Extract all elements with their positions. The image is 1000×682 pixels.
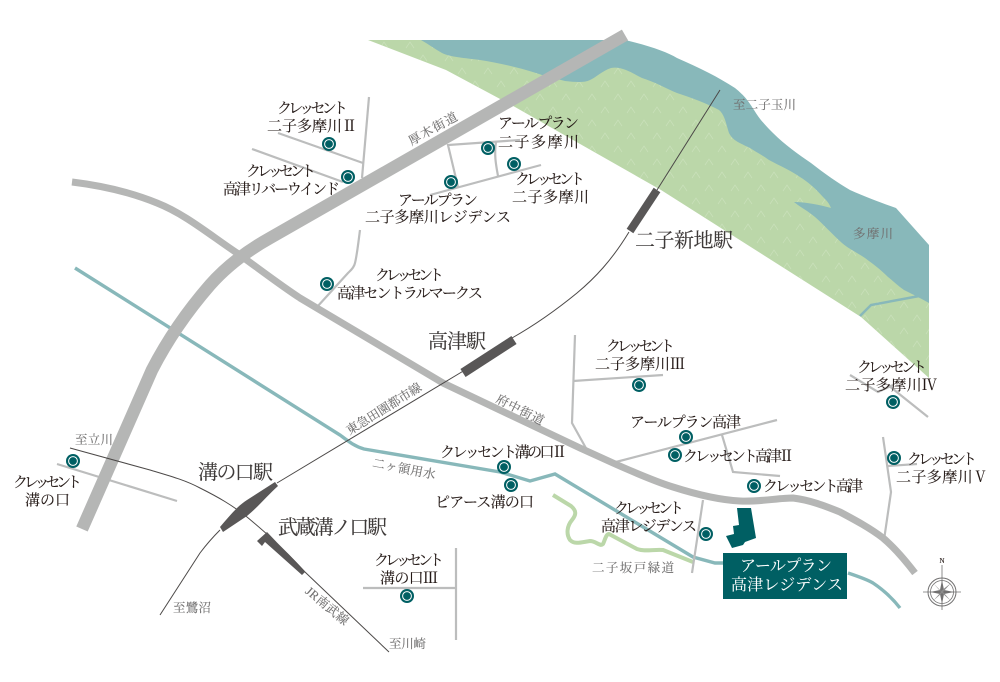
property building	[726, 508, 756, 548]
place and road labels: JR南武線	[303, 583, 352, 628]
greenway	[553, 495, 693, 562]
canal: Nikaryo irrigation	[75, 268, 900, 608]
station names: 高津駅	[428, 330, 486, 353]
place and road labels: 東急田園都市線	[343, 379, 425, 438]
property labels: クレッセント	[606, 339, 675, 355]
place and road labels: 至川崎	[389, 636, 426, 651]
property labels: 二子多摩川Ⅲ	[595, 355, 685, 373]
station names: 二子新地駅	[635, 229, 733, 252]
station: Mizonokuchi	[220, 482, 278, 532]
road: Atsugi Kaido	[82, 35, 625, 529]
property labels	[13, 101, 988, 587]
property labels: 高津リバーウインド	[223, 180, 340, 198]
property labels: 二子多摩川	[512, 188, 589, 206]
property labels: アールプラン	[498, 115, 579, 132]
place and road labels	[75, 98, 893, 651]
property labels: アールプラン	[398, 192, 478, 209]
property labels: 高津セントラルマークス	[337, 284, 483, 302]
property labels: アールプラン高津	[630, 413, 741, 431]
station: Futako-Shinchi	[630, 190, 657, 231]
property labels: 二子多摩川レジデンス	[365, 208, 511, 226]
property labels: クレッセント	[13, 475, 82, 491]
station names: 溝の口駅	[198, 461, 273, 484]
place and road labels: 二ヶ領用水	[371, 455, 437, 482]
station names: 武蔵溝ノ口駅	[278, 516, 387, 539]
station: Takatsu	[463, 340, 514, 373]
property labels: クレッセント高津Ⅱ	[683, 447, 794, 465]
property labels: 溝の口Ⅲ	[380, 570, 438, 587]
icon: compass	[923, 557, 961, 610]
property labels: 溝の口	[25, 492, 70, 509]
place and road labels: 至二子玉川	[733, 98, 796, 112]
property labels: 高津レジデンス	[601, 517, 697, 535]
property labels: クレッセント	[375, 268, 444, 284]
stream into river	[860, 296, 922, 316]
minor roads	[57, 97, 928, 640]
property label box: アールプラン	[740, 557, 832, 575]
place and road labels: 至鷺沼	[173, 601, 211, 615]
green riverbank	[368, 40, 929, 378]
property labels: クレッセント	[374, 553, 444, 569]
property labels: クレッセント	[614, 501, 684, 517]
property label box	[723, 553, 847, 599]
property labels: 二子多摩川Ⅴ	[896, 468, 988, 486]
place and road labels: 府中街道	[494, 391, 547, 428]
property labels: 二子多摩川	[498, 133, 579, 151]
station names	[198, 229, 733, 539]
property labels: クレッセント溝の口Ⅱ	[440, 444, 567, 461]
place and road labels: 厚木街道	[406, 109, 460, 148]
icon: compass: N	[939, 557, 945, 565]
property labels: クレッセント	[277, 101, 348, 117]
property labels: クレッセント	[515, 172, 585, 188]
property labels: ピアース溝の口	[435, 494, 534, 511]
property labels: クレッセント	[907, 452, 977, 468]
markers	[66, 137, 901, 603]
place and road labels: 至立川	[75, 432, 113, 447]
railway: Den-en-toshi line	[160, 90, 720, 615]
station: Musashi-Mizonokuchi	[257, 532, 305, 575]
property labels: 二子多摩川Ⅱ	[267, 117, 357, 135]
railway: JR Nambu line	[70, 448, 389, 652]
road: Fuchu Kaido	[72, 182, 915, 573]
property labels: クレッセント	[246, 164, 316, 180]
place and road labels: 多摩川	[853, 226, 893, 241]
property labels: 二子多摩川Ⅳ	[845, 376, 937, 394]
property labels: クレッセント高津	[763, 477, 863, 495]
river: Tamagawa	[421, 40, 929, 303]
property labels: クレッセント	[857, 360, 927, 376]
property label box: 高津レジデンス	[731, 575, 843, 594]
place and road labels: 二子坂戸緑道	[592, 560, 674, 575]
